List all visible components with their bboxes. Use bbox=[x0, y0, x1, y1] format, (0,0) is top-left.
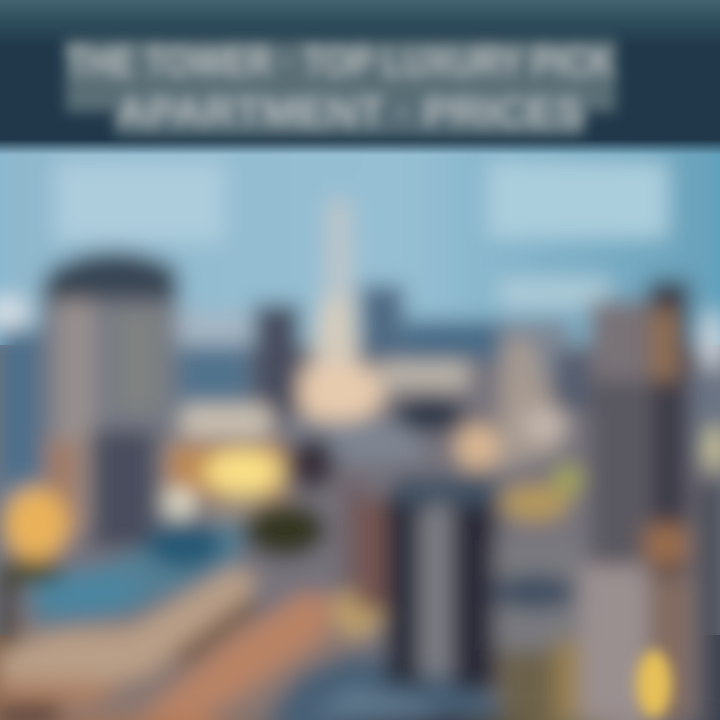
warm terrace foreground bbox=[0, 566, 382, 720]
title lettering: THE TOWER · TOP LUXURY PICK bbox=[66, 38, 614, 85]
yellow corner light bbox=[4, 488, 68, 560]
mid right cluster bbox=[493, 464, 583, 720]
tower base light bbox=[636, 650, 672, 718]
title bbox=[66, 38, 616, 136]
lower city base bbox=[0, 345, 720, 720]
central right buildings bbox=[355, 340, 567, 690]
title backing bbox=[66, 40, 616, 136]
right edge buildings bbox=[700, 426, 720, 720]
central spire tower bbox=[290, 200, 468, 460]
warm lit buildings left bbox=[165, 445, 300, 518]
title lettering: APARTMENT · PRICES bbox=[116, 88, 584, 135]
title lettering bbox=[66, 38, 614, 135]
header banner bbox=[0, 0, 720, 155]
road foreground bbox=[262, 652, 520, 720]
mid left dark tower bbox=[182, 304, 300, 437]
light panels in the sky bbox=[55, 162, 668, 308]
right tall tower bbox=[580, 280, 690, 720]
sky bbox=[0, 120, 720, 380]
left tall tower bbox=[40, 251, 180, 548]
pool and water bbox=[30, 518, 240, 628]
distant skyline bbox=[0, 285, 720, 510]
dark foliage and shadows bbox=[0, 435, 370, 650]
